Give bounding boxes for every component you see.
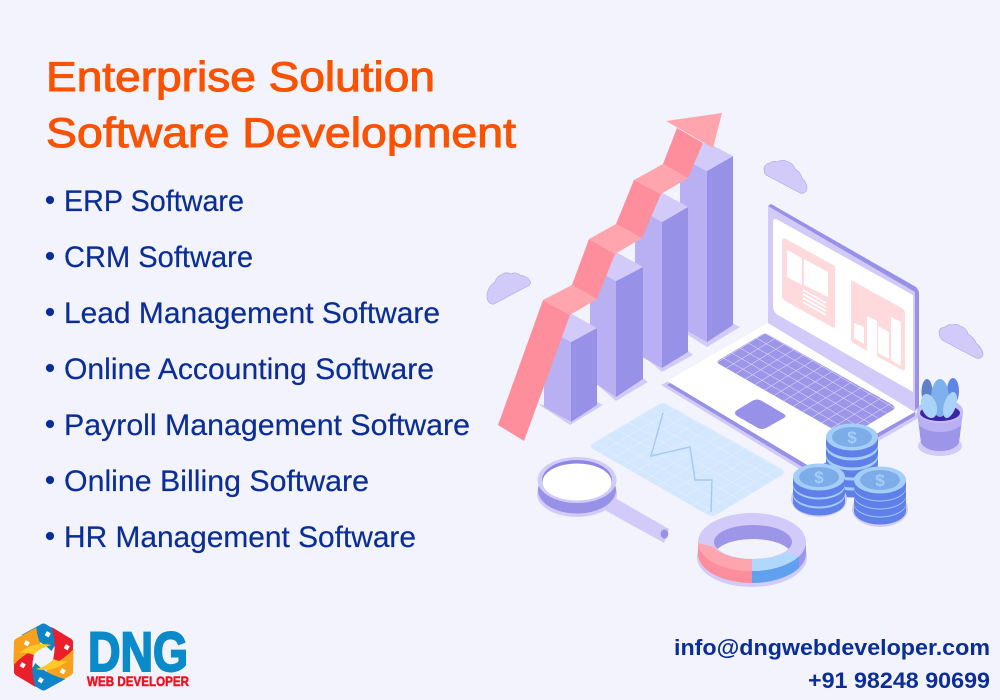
laptop base edge [667, 325, 915, 474]
laptop [661, 204, 922, 478]
sheet line graph [651, 413, 712, 512]
donut chart [697, 513, 807, 587]
arrow: rising red ribbon [498, 113, 722, 441]
potted plant [917, 378, 963, 456]
chart sheet [591, 403, 784, 516]
laptop screen [768, 204, 919, 412]
logo mark: hexagonal swirl [3, 621, 84, 693]
magnifier handle [601, 494, 669, 543]
coin stack: back: $ [847, 428, 857, 447]
laptop deck [667, 323, 915, 469]
laptop touchpad [735, 400, 786, 429]
screen panel: bar chart [851, 280, 905, 370]
coin stack: right: $ [875, 471, 885, 490]
bar 4 [672, 142, 740, 347]
list item: payroll: Payroll Management Software [64, 409, 470, 442]
magnifying glass [537, 457, 669, 543]
plant leaves [918, 378, 960, 420]
DNG logo [3, 620, 189, 693]
screen panel: layout [782, 238, 835, 328]
icon: cloud left [487, 273, 530, 304]
list item: lead management: Lead Management Software [64, 297, 440, 330]
bar 2 [590, 252, 648, 401]
list item: ERP: ERP Software [64, 185, 244, 218]
icon: cloud right [939, 324, 983, 358]
title: Enterprise Solution [46, 53, 435, 100]
title: Software Development [46, 109, 516, 156]
laptop base shadow [661, 326, 922, 478]
list item: online accounting: Online Accounting Software [64, 353, 434, 386]
phone: +91 98248 90699 [808, 668, 990, 693]
bar 3 [635, 192, 693, 372]
list item: CRM: CRM Software [64, 241, 253, 274]
bulleted software list [46, 185, 470, 554]
laptop keyboard [718, 334, 894, 436]
list item: online billing: Online Billing Software [64, 465, 369, 498]
coin stack: left: $ [814, 468, 824, 487]
contact details [674, 635, 990, 693]
bar 1 [538, 313, 603, 425]
bar chart: isometric bars [538, 142, 740, 425]
icon: cloud top right [764, 160, 807, 193]
email: info@dngwebdeveloper.com [674, 635, 990, 660]
list item: HR: HR Management Software [64, 521, 416, 554]
isometric illustration [487, 113, 983, 587]
logo tagline: WEB DEVELOPER [87, 674, 189, 689]
title [46, 53, 516, 156]
logo wordmark: DNG [88, 620, 188, 683]
coin stacks [791, 424, 908, 527]
